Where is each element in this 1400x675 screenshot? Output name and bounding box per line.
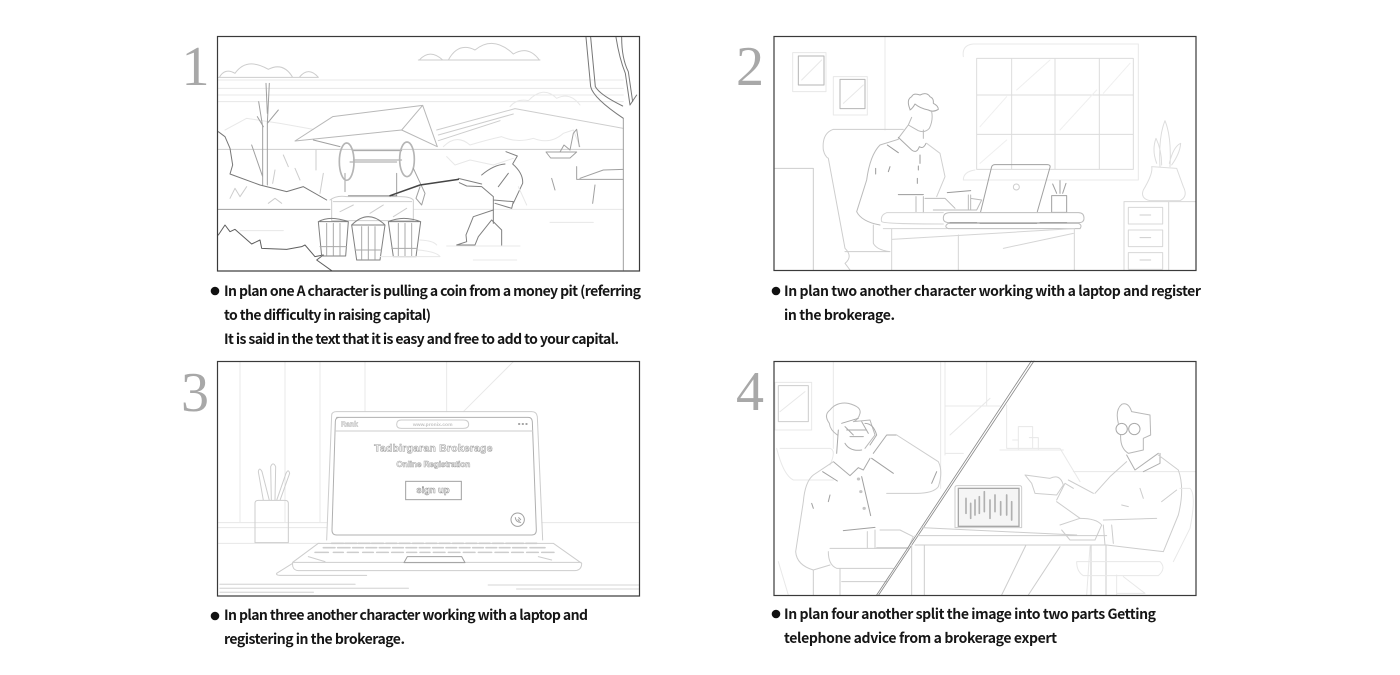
sign up button: sign up — [416, 485, 450, 495]
illustration: character pulling coins from a money well — [218, 37, 637, 271]
browser dots — [519, 421, 527, 427]
caption text: In plan three another character working with a laptop and — [224, 605, 588, 625]
bullet — [211, 287, 219, 295]
browser logo text: Rank — [341, 421, 358, 428]
panel: plan 4 — [736, 361, 1196, 648]
desk — [881, 213, 1084, 270]
pen cup — [1052, 181, 1067, 212]
frame — [774, 362, 1196, 596]
phone icon — [511, 513, 524, 526]
frame — [774, 36, 1196, 270]
bullet — [211, 612, 219, 620]
number 4: 4 — [736, 361, 764, 423]
caption text line 2: telephone advice from a brokerage expert — [784, 628, 1057, 648]
buckets of coins — [318, 217, 440, 260]
bare tree right — [586, 37, 637, 118]
browser url: www.pronix.com — [412, 422, 453, 428]
caption 2 — [772, 281, 1202, 325]
screen heading: Tadbirgaran Brokerage — [374, 443, 493, 454]
illustration: laptop showing online registration — [218, 362, 639, 592]
frame — [218, 362, 640, 596]
number 1: 1 — [182, 36, 210, 98]
background left — [775, 362, 1000, 595]
small bare tree left — [252, 83, 278, 185]
background wall — [218, 362, 639, 592]
panel: plan 2 — [736, 36, 1202, 325]
panel: plan 3 — [181, 362, 640, 649]
caption 3 — [211, 605, 588, 649]
sign up button — [406, 481, 461, 500]
number 2: 2 — [736, 36, 764, 98]
table — [912, 528, 1107, 595]
caption text line 2: to the difficulty in raising capital) — [224, 305, 431, 325]
illustration: split screen telephone advice — [775, 361, 1196, 595]
window — [963, 44, 1138, 180]
caption text line 3: It is said in the text that it is easy and free to add to your capital. — [224, 329, 619, 349]
frame — [218, 36, 640, 271]
office chair — [823, 129, 903, 270]
distant hills and horizon — [218, 80, 623, 209]
laptop with candlestick chart — [955, 486, 1022, 528]
bullet — [772, 610, 780, 618]
character on phone — [796, 403, 941, 595]
laptop — [327, 412, 543, 540]
clouds — [218, 43, 580, 107]
well — [295, 105, 437, 221]
diagonal split line — [877, 361, 1034, 595]
drawers and plant — [1124, 121, 1196, 270]
laptop keyboard — [277, 543, 582, 575]
background right — [1000, 405, 1196, 482]
caption text: In plan two another character working with a laptop and register — [784, 281, 1202, 301]
character pulling rope — [390, 152, 527, 246]
illustration: character working with a laptop — [775, 37, 1196, 270]
number 3: 3 — [181, 362, 209, 424]
character at desk — [857, 94, 982, 225]
wall and picture frames — [793, 37, 885, 130]
panel: plan 1 — [182, 36, 642, 349]
laptop — [981, 165, 1050, 212]
ground and grass — [218, 132, 623, 271]
caption 1 — [211, 281, 642, 349]
caption text line 2: in the brokerage. — [784, 305, 895, 325]
caption 4 — [772, 604, 1157, 648]
advisor with glasses — [1025, 404, 1193, 595]
side cabinet left — [775, 168, 813, 270]
boat — [546, 129, 579, 158]
caption text line 2: registering in the brokerage. — [224, 629, 405, 649]
caption text: In plan four another split the image into two parts Getting — [784, 604, 1157, 624]
caption text: In plan one A character is pulling a coin from a money pit (referring — [224, 281, 642, 301]
screen subheading: Online Registration — [396, 459, 470, 469]
pen cup — [255, 464, 290, 543]
bullet — [772, 287, 780, 295]
